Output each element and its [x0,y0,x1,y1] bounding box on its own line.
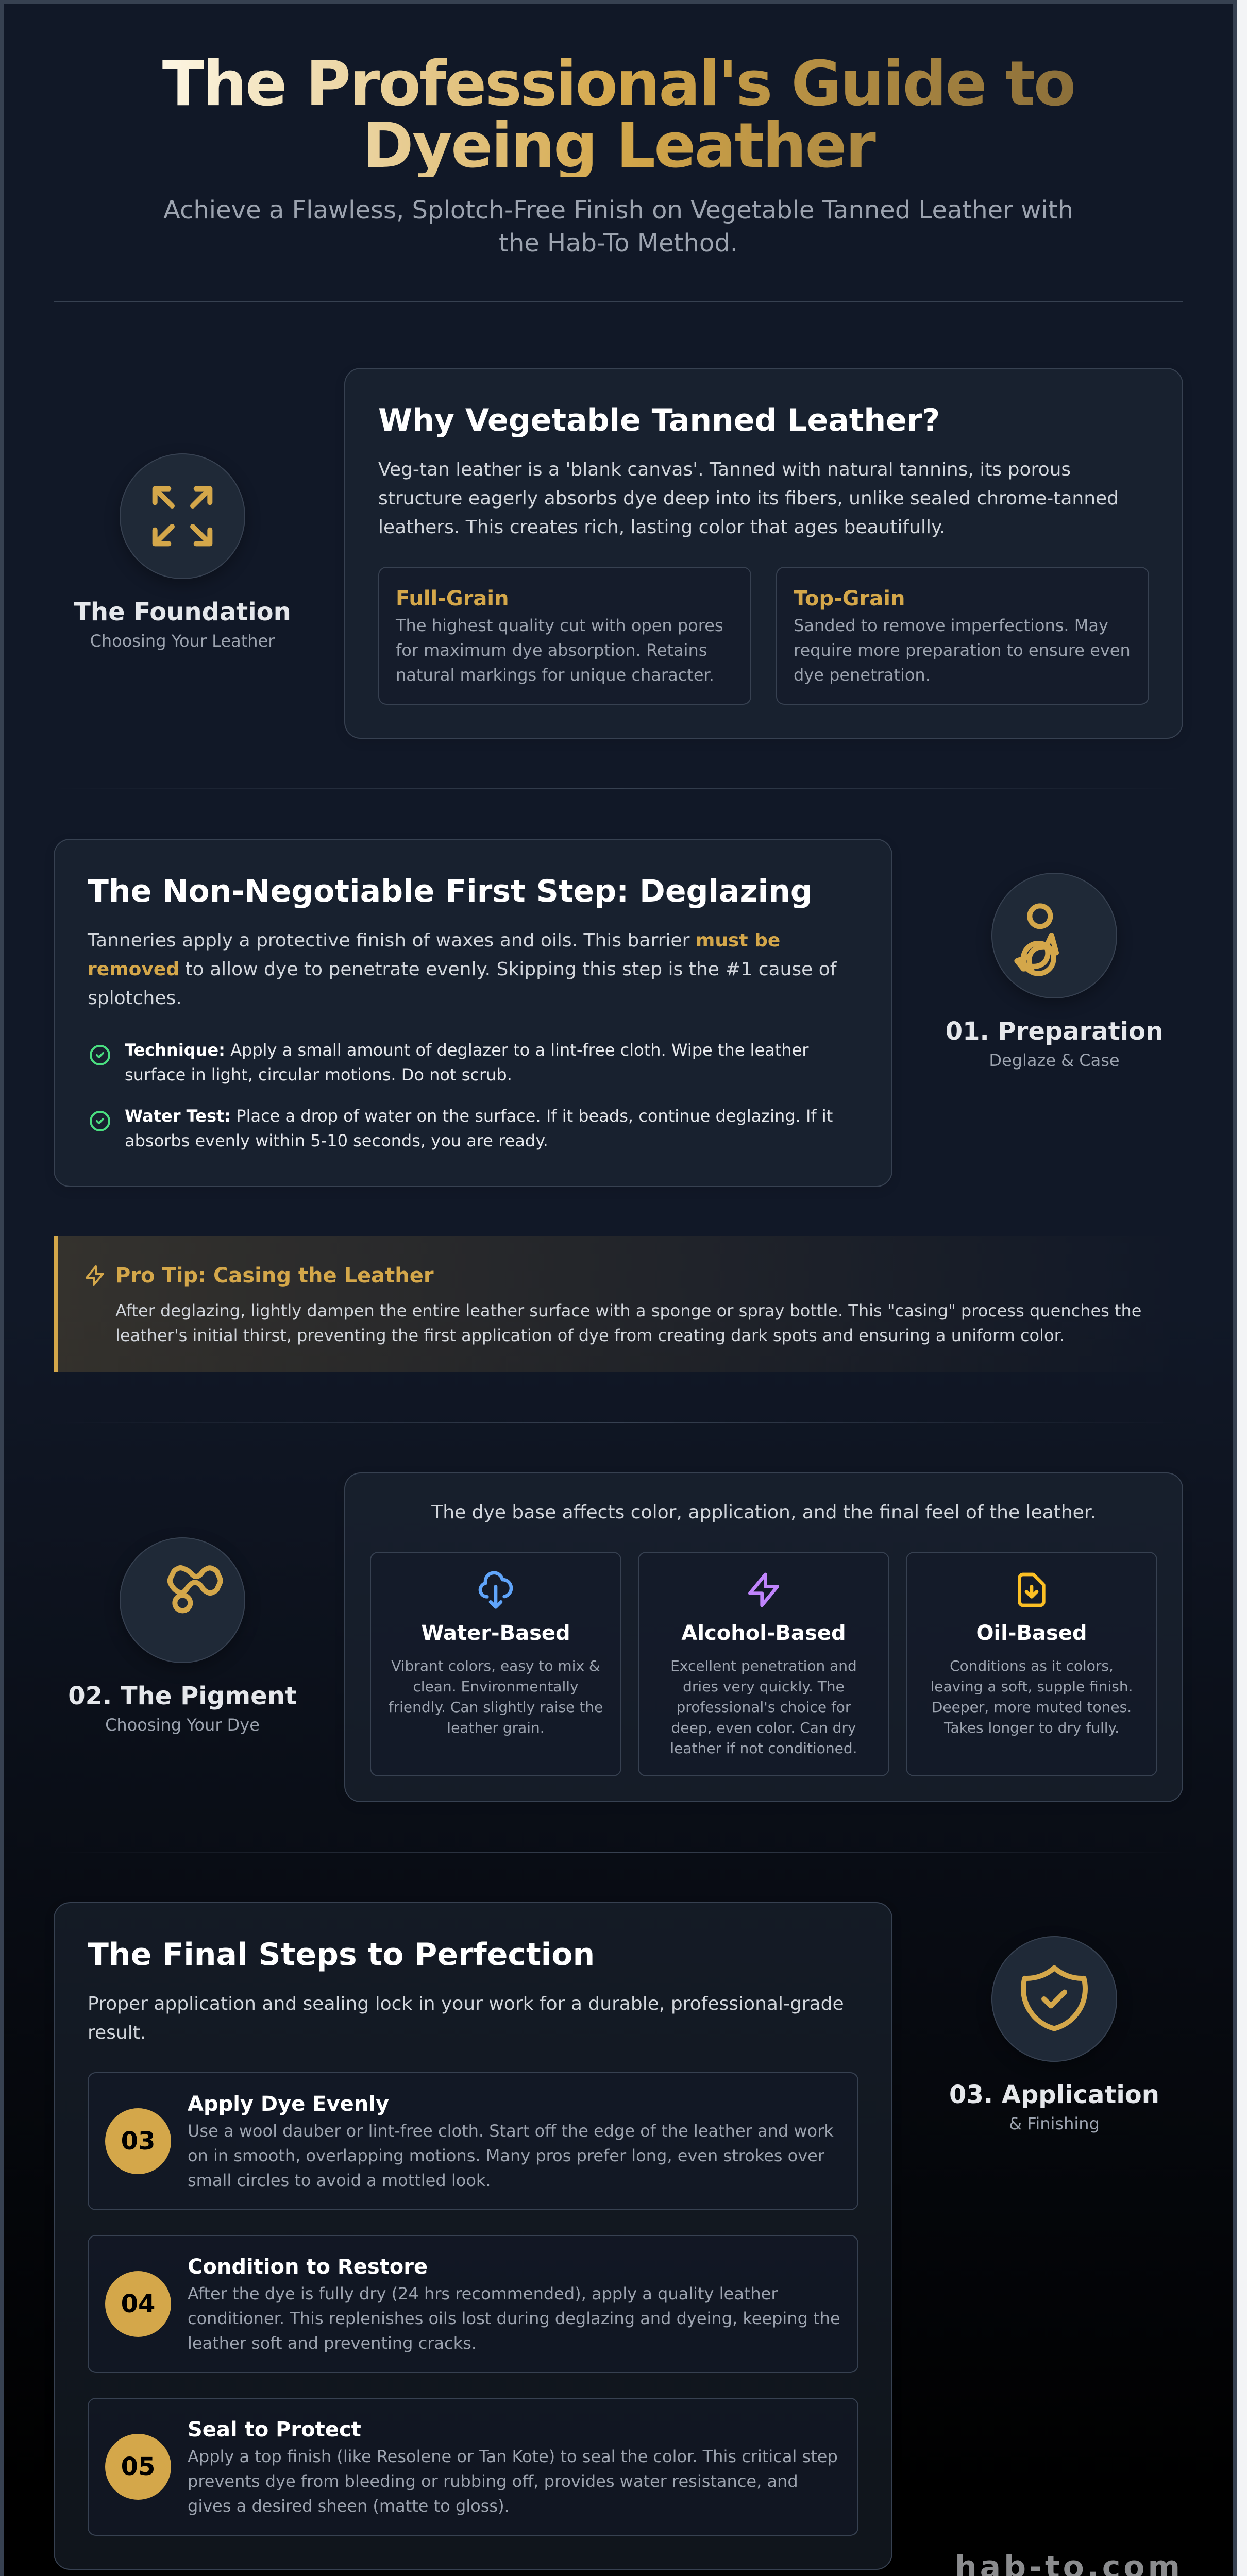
step 03 title: Apply Dye Evenly [188,2092,389,2116]
application subheading: & Finishing [1009,2114,1100,2133]
water test text: absorbs evenly within 5-10 seconds, you are ready. [125,1131,548,1150]
step 04 text [188,2281,840,2355]
foundation heading: The Foundation [74,598,291,626]
panel intro text: removed to allow dye to penetrate evenly. Skipping this step is the #1 cause of [88,959,836,980]
full-grain text: The highest quality cut with open pores [396,616,723,635]
icon: cloud download [478,1571,513,1609]
step 04 text: After the dye is fully dry (24 hrs recommended), apply a quality leather [188,2284,778,2303]
full-grain text: natural markings for unique character. [396,665,714,685]
panel intro text: The dye base affects color, application, and the final feel of the leather. [431,1502,1096,1523]
alcohol-based title: Alcohol-Based [681,1621,846,1645]
icon: expand arrows [120,453,245,579]
panel heading: Why Vegetable Tanned Leather? [378,402,940,438]
alcohol-based text [638,1656,889,1759]
icon: check circle [90,1045,110,1065]
number badge 03: 03 [121,2127,155,2156]
panel intro text: Proper application and sealing lock in your work for a durable, professional-grade [88,1993,844,2014]
title: Dyeing Leather [362,110,874,182]
subtitle: Achieve a Flawless, Splotch-Free Finish on Vegetable Tanned Leather with [163,196,1073,225]
alcohol-based text: leather if not conditioned. [670,1740,857,1757]
step 03 text: Use a wool dauber or lint-free cloth. Start off the edge of the leather and work [188,2121,834,2141]
panel: why vegetable tanned leather [344,368,1183,739]
header [54,48,1183,302]
checklist item: technique [90,1040,809,1084]
panel intro text [88,1990,844,2047]
panel: final steps [54,1902,892,2570]
panel intro text: leathers. This creates rich, lasting color that ages beautifully. [378,517,946,538]
panel intro text: Tanneries apply a protective finish of waxes and oils. This barrier must be [88,930,780,951]
number badge 04 [105,2271,171,2337]
step 05 [88,2398,858,2536]
icon: pigment [120,1537,245,1663]
full-grain text [396,616,723,685]
panel intro text: Veg-tan leather is a 'blank canvas'. Tanned with natural tannins, its porous [378,459,1071,480]
alcohol-based text: deep, even color. Can dry [671,1719,856,1736]
number badge 04: 04 [121,2290,155,2318]
number badge 03 [105,2108,171,2174]
number badge 05 [105,2434,171,2500]
callout: pro tip [54,1236,1183,1372]
oil-based text [906,1656,1157,1738]
card: top-grain [776,567,1149,705]
icon: document download [1011,1569,1052,1611]
preparation heading: 01. Preparation [946,1017,1163,1046]
panel intro text: result. [88,2022,146,2043]
icon: shield check [991,1936,1117,2062]
step 05 text: Apply a top finish (like Resolene or Tan Kote) to seal the color. This critical step [188,2447,838,2466]
subtitle [163,196,1073,258]
alcohol-based text: dries very quickly. The [683,1678,845,1695]
water test text: Water Test: Place a drop of water on the surface. If it beads, continue deglazing. If it [125,1106,833,1126]
panel: deglazing [54,839,892,1187]
water-based title: Water-Based [421,1621,570,1645]
step 03 [88,2072,858,2210]
section label: preparation [946,873,1163,1070]
water-based text [389,1657,603,1736]
section label: application [925,1936,1183,2136]
panel: dye types [344,1472,1183,1802]
top-grain text [794,616,1131,685]
number badge 05: 05 [121,2452,155,2481]
alcohol-based text: Excellent penetration and [670,1657,857,1674]
oil-based text: Deeper, more muted tones. [932,1699,1132,1716]
icon: lightning [748,1572,779,1607]
icon: lightning [86,1265,104,1286]
oil-based text: Conditions as it colors, [950,1657,1114,1674]
section label: the pigment [68,1537,297,1735]
application heading: 03. Application [949,2080,1159,2109]
pigment subheading: Choosing Your Dye [105,1715,260,1735]
icon: check circle [90,1111,110,1131]
step 03 text [188,2119,834,2193]
panel intro text: splotches. [88,988,182,1009]
card: alcohol-based [638,1552,889,1776]
step 04 [88,2235,858,2373]
step 03 text: small circles to avoid a mottled look. [188,2171,491,2190]
top-grain title: Top-Grain [794,587,905,611]
preparation subheading: Deglaze & Case [989,1050,1120,1070]
alcohol-based text: professional's choice for [677,1699,851,1716]
water-based text: clean. Environmentally [413,1678,579,1695]
step 05 text [188,2444,838,2518]
step 05 text: gives a desired sheen (matte to gloss). [188,2496,510,2516]
step 05 text: prevents dye from bleeding or rubbing off, provides water resistance, and [188,2471,798,2491]
card: full-grain [378,567,751,705]
card: water-based [370,1552,621,1776]
icon: preparation [991,873,1117,998]
foundation subheading: Choosing Your Leather [90,631,275,651]
oil-based title: Oil-Based [976,1621,1087,1645]
checklist item: water test [90,1106,833,1150]
panel heading: The Non-Negotiable First Step: Deglazing [88,873,813,909]
title [162,48,1074,182]
top-grain text: Sanded to remove imperfections. May [794,616,1108,635]
step 04 title: Condition to Restore [188,2255,428,2279]
technique text: Technique: Apply a small amount of deglazer to a lint-free cloth. Wipe the leather [125,1040,808,1060]
panel intro text: structure eagerly absorbs dye deep into its fibers, unlike sealed chrome-tanned [378,488,1119,509]
tip text [115,1301,1141,1345]
tip text: After deglazing, lightly dampen the entire leather surface with a sponge or spray bottle. This "casing" process quenches the [115,1301,1141,1320]
technique text: surface in light, circular motions. Do not scrub. [125,1065,512,1084]
technique text [125,1040,809,1084]
step 04 text: conditioner. This replenishes oils lost during deglazing and dyeing, keeping the [188,2309,840,2328]
pigment heading: 02. The Pigment [68,1682,297,1710]
tip title: Pro Tip: Casing the Leather [115,1264,434,1287]
step 03 text: on in smooth, overlapping motions. Many pros prefer long, even strokes over [188,2146,824,2165]
step 05 title: Seal to Protect [188,2418,361,2442]
oil-based text: Takes longer to dry fully. [944,1719,1119,1736]
tip text: leather's initial thirst, preventing the first application of dye from creating dark spots and ensuring a uniform color. [115,1326,1065,1345]
top-grain text: require more preparation to ensure even [794,640,1131,660]
full-grain title: Full-Grain [396,587,509,611]
step 04 text: leather soft and preventing cracks. [188,2333,477,2353]
panel intro text [88,930,837,1009]
card: oil-based [906,1552,1157,1776]
water-based text: Vibrant colors, easy to mix & [391,1657,600,1674]
full-grain text: for maximum dye absorption. Retains [396,640,707,660]
panel heading: The Final Steps to Perfection [88,1937,595,1973]
water test text [125,1106,833,1150]
section label: the foundation [74,453,291,651]
water-based text: leather grain. [447,1719,545,1736]
water-based text: friendly. Can slightly raise the [389,1699,603,1716]
panel intro text [378,459,1119,538]
subtitle: the Hab-To Method. [499,229,738,258]
oil-based text: leaving a soft, supple finish. [930,1678,1133,1695]
top-grain text: dye penetration. [794,665,931,685]
title: The Professional's Guide to [162,48,1074,120]
